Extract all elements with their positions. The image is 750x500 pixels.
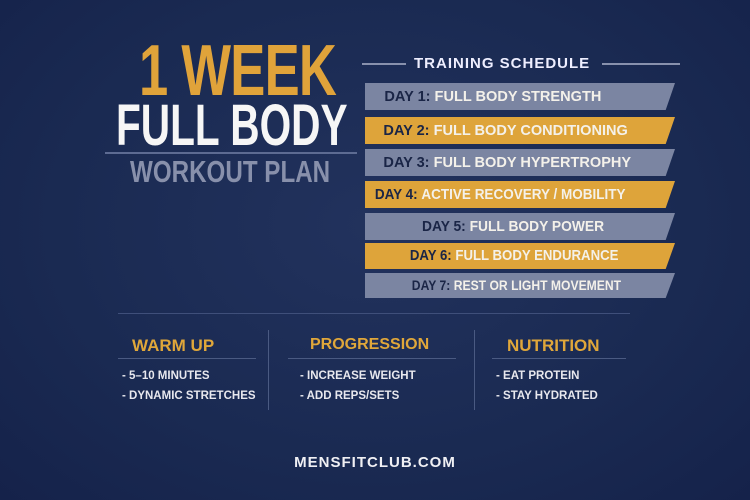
bar: day 3 [365,149,675,176]
bar: day 1: DAY 1: FULL BODY STRENGTH [384,88,601,105]
schedule bars [365,83,675,298]
title: FULL BODY: FULL BODY [116,93,348,158]
bar: day 2: DAY 2: FULL BODY CONDITIONING [383,122,628,139]
subtitle: WORKOUT PLAN: WORKOUT PLAN [130,154,330,189]
heading: progression: PROGRESSION [310,336,429,353]
panel: nutrition [492,336,626,402]
bar: day 7: DAY 7: REST OR LIGHT MOVEMENT [412,278,621,293]
title: 1 WEEK: 1 WEEK [139,31,336,111]
bar: day 1 [365,83,675,110]
bar: day 4: DAY 4: ACTIVE RECOVERY / MOBILITY [375,186,625,203]
text: progression items [300,370,416,402]
text: nutrition items [496,370,598,402]
bar: day 5 [365,213,675,240]
text: warm up items [122,370,256,402]
text: warm up items: - DYNAMIC STRETCHES [122,390,256,402]
text: warm up items: - 5–10 MINUTES [122,370,210,382]
heading: training schedule: TRAINING SCHEDULE [414,55,590,72]
footer: website: MENSFITCLUB.COM [294,454,456,471]
heading: nutrition: NUTRITION [507,336,600,355]
text: nutrition items: - STAY HYDRATED [496,390,598,402]
bar: day 2 [365,117,675,144]
bar: day 4 [365,181,675,208]
text: nutrition items: - EAT PROTEIN [496,370,579,382]
text: progression items: - INCREASE WEIGHT [300,370,416,382]
bar: day 6 [365,243,675,269]
bar: day 6: DAY 6: FULL BODY ENDURANCE [410,247,618,264]
heading: warm up: WARM UP [132,336,214,355]
bar: day 5: DAY 5: FULL BODY POWER [422,218,604,235]
bar: day 7 [365,273,675,298]
panel: warm up [118,336,256,402]
bar: day 3: DAY 3: FULL BODY HYPERTROPHY [383,154,631,171]
panel: progression [288,336,456,402]
text: progression items: - ADD REPS/SETS [300,390,399,402]
